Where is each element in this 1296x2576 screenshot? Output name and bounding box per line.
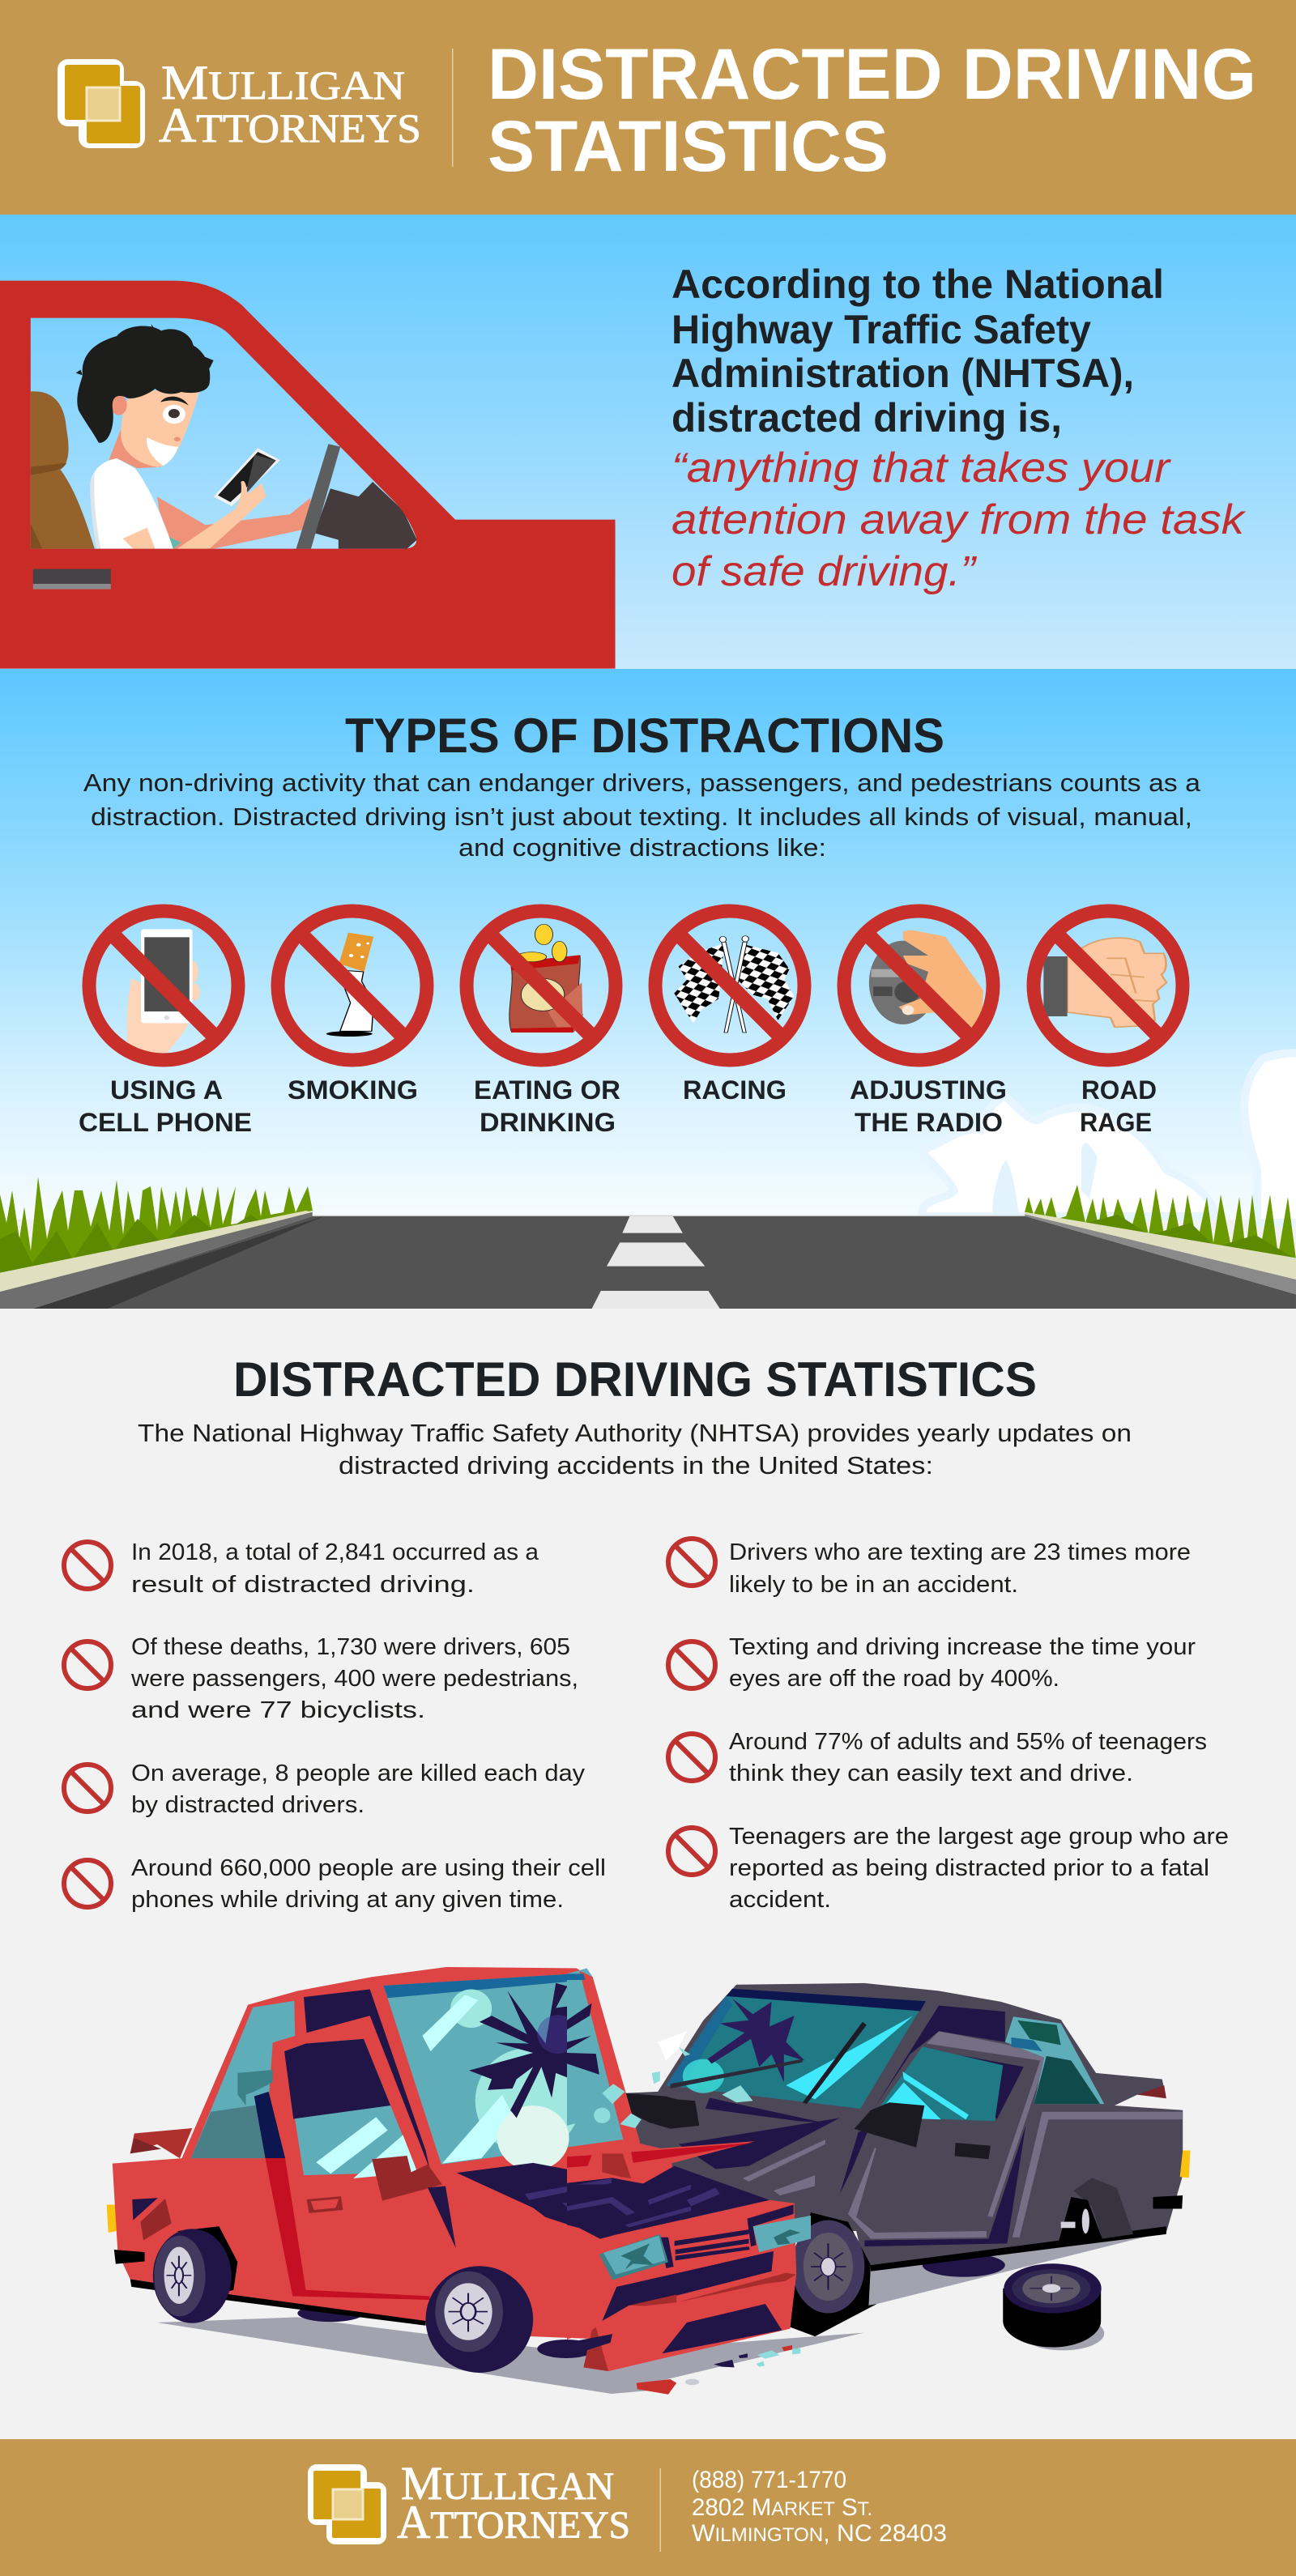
icon: no racing: [655, 911, 804, 1060]
stat 7: Around 77% of adults and 55% of teenagers: [729, 1729, 1207, 1755]
list: right statistics: [668, 1539, 1229, 1913]
ground shadows: [157, 2233, 1162, 2394]
quote: attention away from the task: [671, 496, 1247, 543]
labels: distraction types: ROAD: [1081, 1075, 1157, 1105]
title: [488, 33, 1256, 186]
logo: Mulligan Attorneys: [58, 56, 421, 152]
stat 4: [64, 1855, 606, 1913]
icon: no cell phone: [89, 911, 238, 1060]
labels: distraction types: SMOKING: [288, 1075, 418, 1105]
heading: types of distractions: TYPES OF DISTRACTIONS: [345, 709, 944, 763]
stat 2: Of these deaths, 1,730 were drivers, 605: [131, 1634, 570, 1660]
flying glass: [594, 2046, 753, 2128]
paragraph: statistics intro: [138, 1419, 1132, 1480]
paragraph: statistics intro: distracted driving accidents in the United States:: [339, 1451, 933, 1480]
intro text: distracted driving is,: [671, 395, 1062, 441]
stat 8: Teenagers are the largest age group who are: [729, 1824, 1229, 1850]
crumpled hood: [457, 2163, 648, 2239]
stat 5: [668, 1539, 1191, 1598]
title: STATISTICS: [488, 105, 889, 186]
stat 3: [64, 1761, 586, 1818]
door handle: [33, 569, 111, 590]
stat 8: [668, 1824, 1229, 1913]
car: red hatchback front: [567, 1969, 811, 2395]
detached wheel: [1003, 2263, 1102, 2348]
icon: no smoking: [278, 911, 427, 1060]
stat 3: On average, 8 people are killed each day: [131, 1761, 586, 1786]
truck body: [0, 281, 616, 669]
paragraph: statistics intro: The National Highway Traffic Safety Authority (NHTSA) provides yearly updates on: [138, 1419, 1132, 1447]
labels: distraction types: [79, 1075, 1157, 1137]
paragraph: types intro: and cognitive distractions like:: [458, 833, 826, 862]
icon: no road rage: [1034, 911, 1183, 1060]
labels: distraction types: ADJUSTING: [850, 1075, 1007, 1105]
labels: distraction types: RACING: [683, 1075, 787, 1105]
illustration: car crash: [107, 1967, 1190, 2395]
clouds: [922, 1053, 1296, 1223]
illustration: left grass: [0, 1177, 313, 1273]
intro text: Highway Traffic Safety: [671, 307, 1091, 352]
labels: distraction types: USING A: [110, 1075, 223, 1105]
paragraph: types intro: distraction. Distracted driving isn’t just about texting. It includes all kinds of visual, manual,: [91, 803, 1192, 831]
footer contact details: [692, 2467, 947, 2547]
page background: [0, 1309, 1296, 2439]
car: red hatchback rear: [107, 1967, 702, 2373]
stat 4: phones while driving at any given time.: [131, 1887, 564, 1913]
footer logo: [308, 2457, 630, 2548]
quote: [671, 445, 1247, 595]
car: grey pickup: [625, 1983, 1190, 2348]
red windshield edge over grey car: [567, 1969, 639, 2144]
header band: [0, 0, 1296, 215]
icon: no eating: [467, 911, 616, 1060]
steering wheel and legs: [296, 444, 417, 549]
stat 6: [668, 1634, 1196, 1692]
stat 5: Drivers who are texting are 23 times more: [729, 1539, 1191, 1565]
title: DISTRACTED DRIVING: [488, 33, 1256, 114]
stat 6: eyes are off the road by 400%.: [729, 1666, 1059, 1692]
footer logo: ATTORNEYS: [397, 2496, 630, 2548]
stat 5: likely to be in an accident.: [729, 1572, 1018, 1598]
heading: statistics: DISTRACTED DRIVING STATISTICS: [233, 1352, 1037, 1407]
grey front wheel: [791, 2212, 877, 2336]
red rear wheel: [153, 2226, 237, 2323]
quote: of safe driving.”: [671, 548, 978, 595]
footer contact details: WILMINGTON, NC 28403: [692, 2520, 947, 2547]
list: left statistics: [64, 1539, 606, 1913]
driver: [76, 324, 312, 549]
stat 1: [64, 1539, 539, 1598]
illustration: right grass: [1025, 1185, 1296, 1259]
seat: [31, 391, 95, 549]
windshield crack: [469, 1983, 599, 2118]
footer contact details: (888) 771-1770: [692, 2467, 846, 2493]
labels: distraction types: THE RADIO: [855, 1108, 1003, 1137]
stat 6: Texting and driving increase the time your: [729, 1634, 1196, 1660]
red front wheel: [426, 2266, 595, 2373]
footer logo: MULLIGAN: [401, 2457, 614, 2510]
paragraph: types intro: Any non-driving activity that can endanger drivers, passengers, and pedestrians counts as a: [83, 769, 1201, 797]
stat 7: think they can easily text and drive.: [729, 1761, 1133, 1786]
footer contact details: 2802 MARKET ST.: [692, 2494, 872, 2521]
stat 2: and were 77 bicyclists.: [131, 1697, 425, 1723]
stat 2: [64, 1634, 578, 1723]
stat 3: by distracted drivers.: [131, 1792, 364, 1818]
paragraph: types intro: [83, 769, 1201, 862]
stat 2: were passengers, 400 were pedestrians,: [130, 1666, 578, 1692]
labels: distraction types: CELL PHONE: [79, 1108, 252, 1137]
panel: definition sky: [0, 215, 1296, 669]
stat 1: In 2018, a total of 2,841 occurred as a: [131, 1539, 539, 1565]
intro text: Administration (NHTSA),: [671, 351, 1134, 396]
illustration: road: [0, 1211, 1296, 1309]
logo: Mulligan Attorneys: MULLIGAN: [161, 56, 405, 109]
labels: distraction types: EATING OR: [474, 1075, 620, 1105]
stat 8: reported as being distracted prior to a fatal: [729, 1855, 1209, 1881]
intro text: [671, 262, 1247, 595]
stat 1: result of distracted driving.: [131, 1572, 475, 1598]
panel: types of distractions sky: [0, 669, 1296, 1220]
road dashes: [592, 1216, 720, 1309]
labels: distraction types: DRINKING: [480, 1108, 616, 1137]
stat 8: accident.: [729, 1887, 831, 1913]
debris: [637, 2345, 800, 2395]
labels: distraction types: RAGE: [1080, 1108, 1152, 1137]
icon: no adjusting the radio: [844, 911, 993, 1060]
stat 7: [668, 1729, 1207, 1786]
quote: “anything that takes your: [671, 445, 1172, 492]
footer band: [0, 2439, 1296, 2576]
intro text: According to the National: [671, 262, 1164, 307]
illustration: driver on phone in red truck: [0, 281, 616, 669]
logo: Mulligan Attorneys: ATTORNEYS: [159, 99, 421, 152]
stat 4: Around 660,000 people are using their cell: [131, 1855, 606, 1881]
